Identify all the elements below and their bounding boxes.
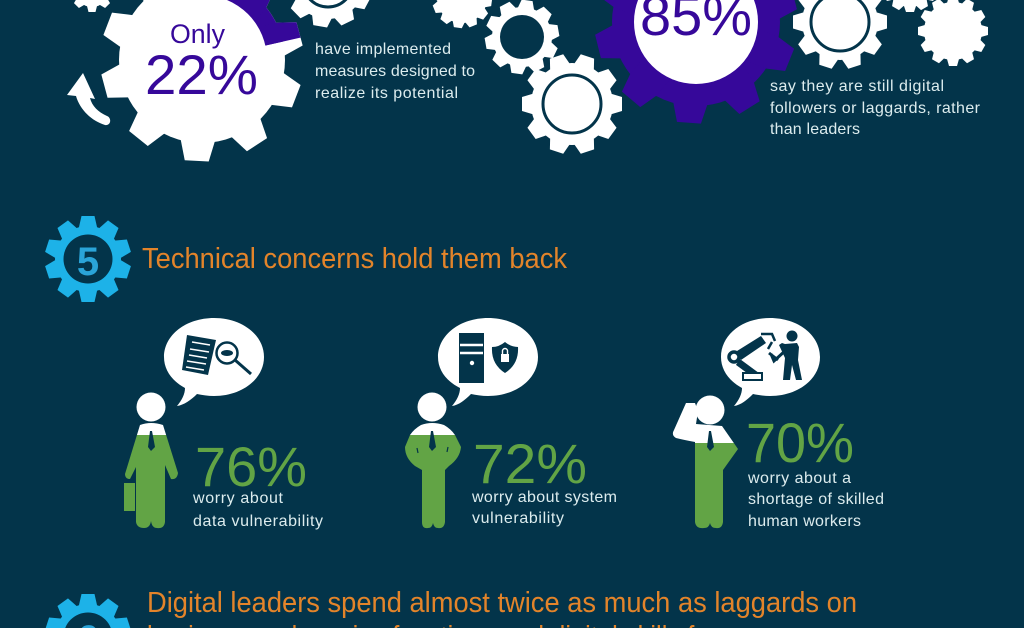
text: system vulnerability	[471, 489, 617, 527]
person: 76% figure with briefcase	[124, 392, 178, 528]
text: skilled human workers: human workers	[748, 513, 861, 530]
label: only: Only	[170, 19, 225, 49]
heading: digital leaders spend: Digital leaders spend almost twice as much as laggards on	[147, 587, 857, 619]
icon: document and magnifier	[182, 335, 251, 375]
text: say they are still digital: say they are still digital	[770, 78, 944, 95]
stat: 72%: 72%	[473, 432, 587, 495]
text: have implemented: measures designed to	[315, 63, 475, 80]
icon: small gear top left	[70, 0, 114, 12]
text: have implemented: realize its potential	[315, 85, 458, 102]
icon: ring gear top	[282, 0, 374, 28]
text: have implemented: have implemented	[315, 41, 451, 58]
text: system vulnerability: vulnerability	[472, 510, 564, 527]
person: 72% figure hands on hips	[405, 392, 461, 528]
text: data vulnerability: data vulnerability	[193, 513, 323, 530]
icon: section number 6	[44, 594, 132, 628]
chart: 22% gear	[100, 0, 304, 162]
icon: section number 5: 5	[77, 240, 99, 284]
icon: section number 5	[44, 216, 132, 302]
text: say they are still digital	[770, 78, 981, 138]
text: say they are still digital: followers or laggards, rather	[770, 100, 981, 117]
person: 70% figure holding phone	[673, 396, 738, 528]
stat: 76%: 76%	[195, 435, 307, 498]
icon: ring gear right	[793, 0, 887, 70]
icon: small gear top right	[881, 0, 939, 12]
text: system vulnerability: worry about system	[471, 489, 617, 506]
stat: 70%: 70%	[746, 411, 854, 474]
chart: 85% gear	[594, 0, 798, 124]
text: skilled human workers: worry about a	[747, 470, 851, 487]
speech bubble: skilled workers	[721, 318, 820, 406]
text: data vulnerability	[192, 490, 323, 530]
icon: robot arm and worker	[729, 330, 802, 380]
speech bubble: data	[164, 318, 264, 406]
icon: rotation arrow	[67, 73, 110, 125]
icon: server and shield	[459, 333, 518, 383]
icon: solid gear top middle	[431, 0, 493, 29]
text: skilled human workers: shortage of skilled	[748, 491, 884, 508]
text: data vulnerability: worry about	[192, 490, 284, 507]
heading: technical concerns: Technical concerns hold them back	[142, 243, 567, 275]
stat: 22%: 22%	[145, 43, 258, 106]
icon: large ring gear	[522, 53, 622, 155]
text: skilled human workers	[747, 470, 884, 530]
text: have implemented	[315, 41, 475, 102]
speech bubble: system	[438, 318, 538, 406]
icon: hollow gear	[484, 0, 560, 75]
text: say they are still digital: than leaders	[770, 121, 860, 138]
icon: solid gear right	[918, 0, 988, 66]
